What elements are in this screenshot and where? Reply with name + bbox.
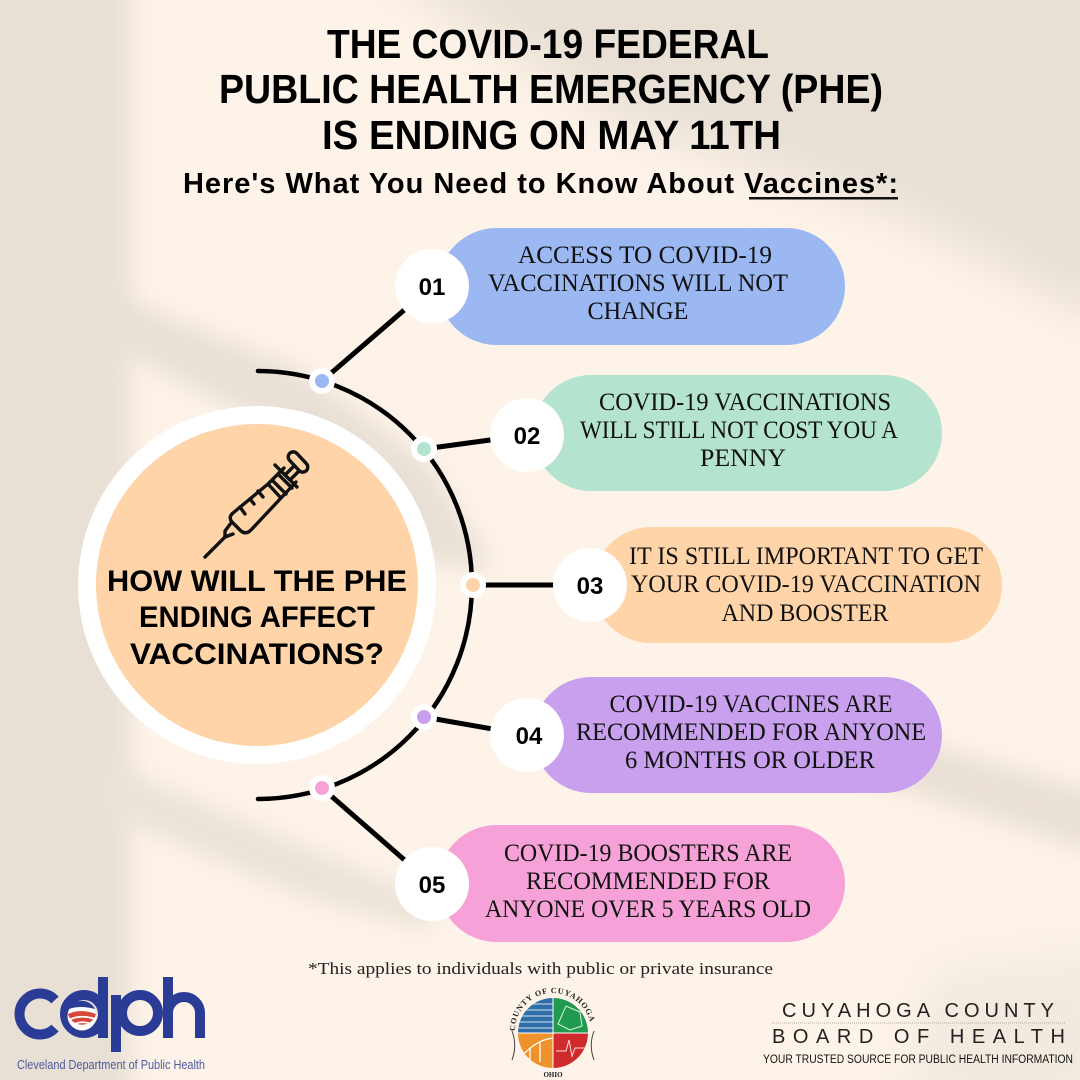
item 1: 01	[419, 274, 445, 301]
icon: syringe	[205, 450, 310, 557]
subtitle: Here's What You Need to Know About Vaccines*:	[183, 168, 898, 200]
logo: Cuyahoga County seal: OHIO	[543, 1071, 563, 1079]
item 3	[460, 527, 1002, 643]
icon: flag globe	[68, 1001, 96, 1030]
item 4: 6 MONTHS OR OLDER	[625, 747, 875, 774]
item 4: COVID-19 VACCINES ARE	[610, 691, 892, 718]
footnote: *This applies to individuals with public or private insurance	[308, 959, 773, 978]
item 2	[411, 375, 942, 491]
logo: Cuyahoga County Board of Health: CUYAHOGA COUNTY	[782, 1000, 1054, 1022]
item 5	[309, 775, 845, 942]
logo: CDPH: Cleveland Department of Public Health	[17, 1058, 205, 1072]
item 5: RECOMMENDED FOR	[526, 868, 770, 895]
item 1	[309, 228, 845, 394]
title	[219, 21, 883, 158]
circle heading: ENDING AFFECT	[139, 601, 375, 634]
item 1: CHANGE	[588, 298, 688, 325]
item 1: ACCESS TO COVID-19	[518, 242, 772, 269]
item 3: 03	[577, 573, 603, 600]
item 1: VACCINATIONS WILL NOT	[488, 270, 788, 297]
circle heading	[107, 565, 407, 671]
item 5: COVID-19 BOOSTERS ARE	[504, 840, 792, 867]
item 4: 04	[516, 723, 543, 750]
logo: CDPH	[17, 977, 205, 1072]
arc connector	[258, 371, 472, 799]
item 3: YOUR COVID-19 VACCINATION	[631, 571, 981, 598]
item 3: IT IS STILL IMPORTANT TO GET	[629, 543, 983, 570]
item 5: ANYONE OVER 5 YEARS OLD	[485, 896, 811, 923]
logo: Cuyahoga County seal	[510, 988, 594, 1079]
item 2: COVID-19 VACCINATIONS	[599, 389, 891, 416]
item 3: AND BOOSTER	[722, 600, 889, 627]
circle heading: VACCINATIONS?	[130, 638, 384, 671]
central circle	[78, 406, 436, 764]
title: PUBLIC HEALTH EMERGENCY (PHE)	[219, 66, 883, 112]
logo: Cuyahoga County Board of Health	[763, 1000, 1073, 1066]
logo: Cuyahoga County Board of Health: BOARD OF HEALTH	[772, 1026, 1065, 1048]
item 2: 02	[514, 423, 540, 450]
item 4	[411, 677, 942, 793]
item 5: 05	[419, 872, 445, 899]
item 4: RECOMMENDED FOR ANYONE	[576, 719, 926, 746]
title: THE COVID-19 FEDERAL	[327, 21, 769, 67]
circle heading: HOW WILL THE PHE	[107, 565, 407, 598]
item 2: PENNY	[700, 445, 786, 472]
title: IS ENDING ON MAY 11TH	[322, 112, 781, 158]
item 2: WILL STILL NOT COST YOU A	[580, 417, 898, 444]
logo: Cuyahoga County seal: COUNTY OF CUYAHOGA	[510, 988, 594, 1030]
